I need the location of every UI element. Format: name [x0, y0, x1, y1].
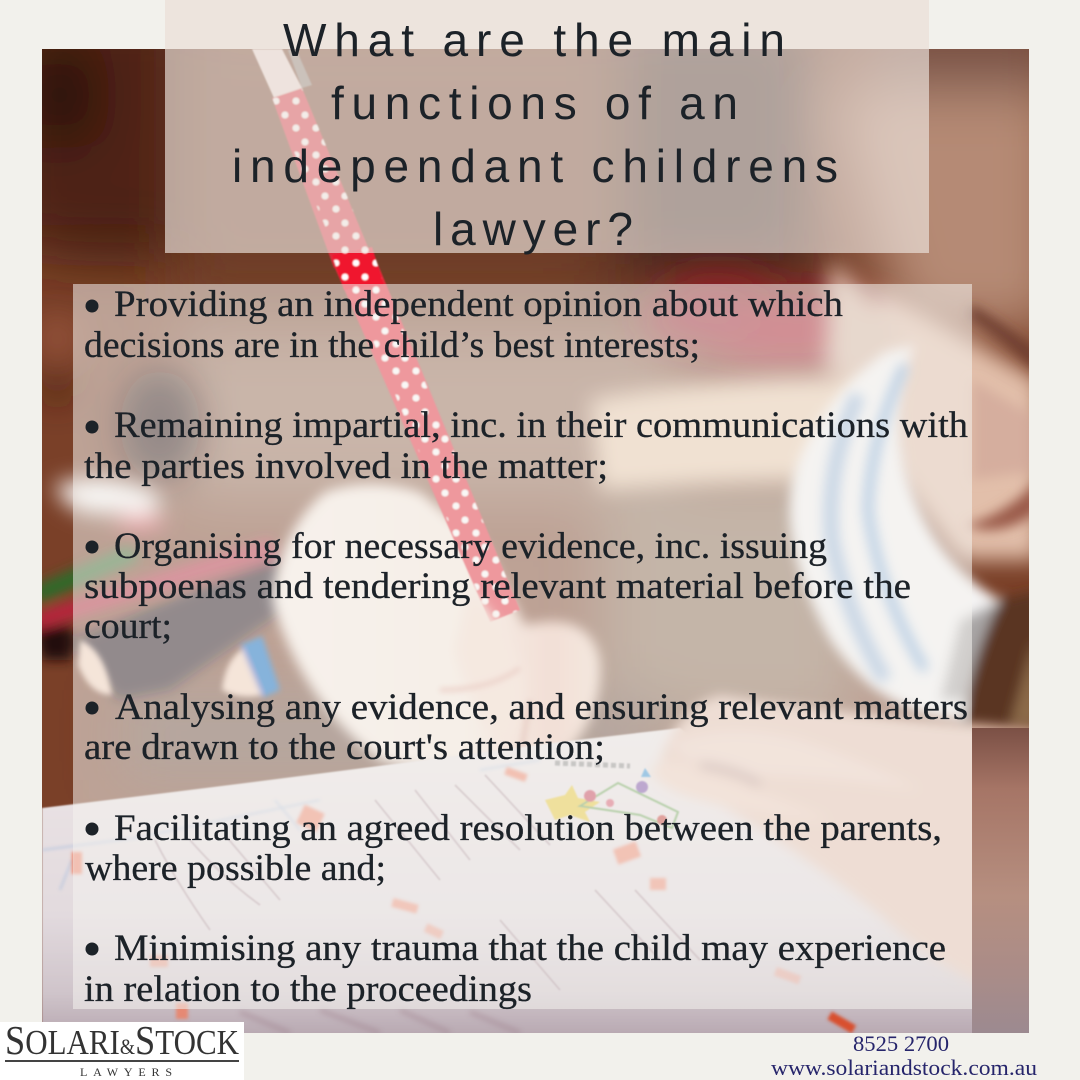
face contour shadow	[968, 302, 1029, 370]
list item 2: Remaining impartial, inc. in their communications with	[114, 405, 969, 446]
title: main heading: What are the main	[283, 14, 790, 66]
child's drawing on paper	[545, 763, 678, 828]
list item 1: Providing an independent opinion about which	[114, 284, 844, 325]
logo: Solari & Stock Lawyers: SOLARI&STOCK	[5, 1017, 239, 1063]
contact details: 8525 2700	[853, 1031, 949, 1056]
list item 5	[85, 808, 942, 889]
list item 3: subpoenas and tendering relevant material before the	[84, 566, 911, 607]
title: main heading	[232, 14, 843, 255]
title panel	[165, 0, 929, 253]
red marks on paper	[72, 767, 856, 1033]
red polka dot pencil	[252, 49, 520, 622]
paper sheet	[42, 728, 972, 1033]
list item 3: Organising for necessary evidence, inc. issuing	[114, 526, 827, 567]
list item 2	[84, 405, 969, 487]
list item 5: Facilitating an agreed resolution between the parents,	[114, 808, 942, 849]
lower hand	[654, 690, 1029, 977]
white blurred eraser on desk	[55, 479, 160, 514]
fingers over pencil	[477, 590, 502, 622]
contact details	[771, 1031, 1037, 1080]
title: main heading: independant childrens	[232, 140, 843, 192]
list item 3: court;	[84, 606, 172, 647]
list item 1: decisions are in the child’s best interests;	[84, 325, 700, 366]
paper markings	[155, 775, 700, 990]
contact details: www.solariandstock.com.au	[771, 1055, 1037, 1080]
list item 5: where possible and;	[85, 848, 386, 889]
list item 6: in relation to the proceedings	[84, 969, 532, 1010]
list item 4: Analysing any evidence, and ensuring relevant matters	[115, 687, 968, 728]
list: functions of the lawyer	[84, 284, 969, 1010]
title: main heading: lawyer?	[433, 203, 638, 255]
hand holding pencil	[272, 484, 600, 769]
list item 4	[84, 687, 968, 768]
title: main heading: functions of an	[331, 77, 743, 129]
right edge of hand, outside panel	[972, 728, 1032, 1034]
list item 4: are drawn to the court's attention;	[84, 727, 605, 768]
panel: functions list background	[73, 284, 972, 1009]
list item 2: the parties involved in the matter;	[84, 446, 608, 487]
logo: Solari & Stock Lawyers: LAWYERS	[80, 1065, 172, 1079]
coloured pencils on desk	[36, 538, 285, 700]
list item 6	[84, 928, 946, 1010]
list item 1	[84, 284, 844, 366]
list item 6: Minimising any trauma that the child may experience	[114, 928, 946, 969]
shirt	[790, 345, 1000, 720]
hair	[958, 589, 1029, 728]
list item 3	[84, 526, 911, 647]
